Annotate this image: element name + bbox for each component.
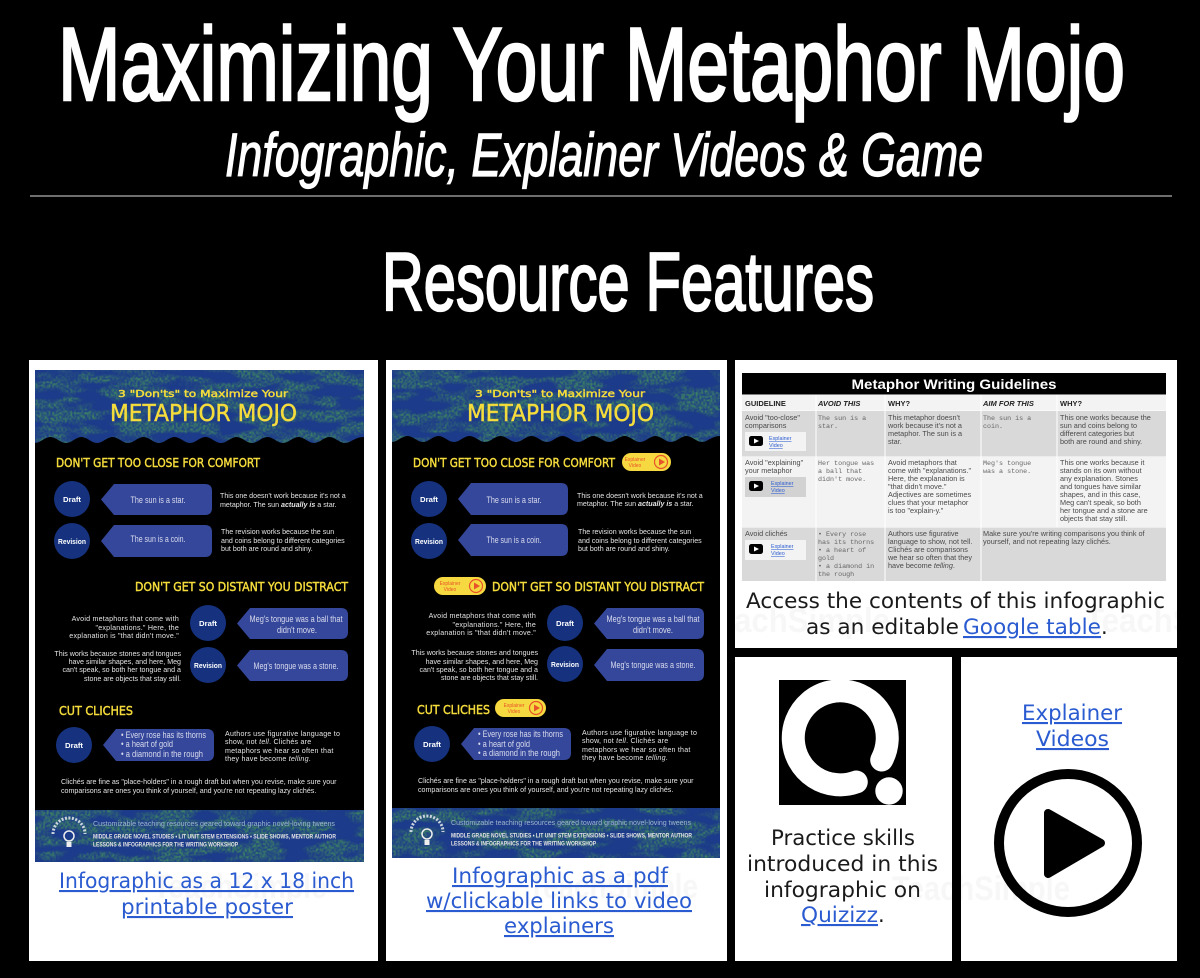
guidelines table: her tongue and a stone are xyxy=(1060,506,1148,515)
panel: printable poster xyxy=(29,360,378,961)
poster thumbnail with video buttons: Meg's tongue was a ball that xyxy=(606,614,700,624)
guidelines table: both are round and shiny. xyxy=(1060,437,1142,446)
caption: Access the contents of this infographic xyxy=(746,589,1165,613)
poster thumbnail: explanation is "that didn't move." xyxy=(69,632,179,640)
poster thumbnail with video buttons: • Every rose has its thorns xyxy=(478,729,563,739)
link text xyxy=(426,864,692,938)
caption: Google table xyxy=(963,615,1101,639)
caption xyxy=(746,589,1165,639)
caption: Practice skills xyxy=(771,826,915,850)
poster thumbnail: METAPHOR MOJO xyxy=(110,401,297,427)
poster thumbnail: The sun is a coin. xyxy=(130,534,186,544)
poster thumbnail: 3 "Don'ts" to Maximize Your xyxy=(118,389,289,400)
link text: explainers xyxy=(504,914,614,938)
link text: w/clickable links to video xyxy=(426,889,692,913)
caption: introduced in this xyxy=(747,852,938,876)
guidelines table: Make sure you're writing comparisons you think of xyxy=(983,529,1146,538)
guidelines table: shapes, and in this case, xyxy=(1060,490,1140,499)
guidelines table: "that didn't move." xyxy=(888,482,947,491)
poster thumbnail: MIDDLE GRADE NOVEL STUDIES • LIT UNIT STEM EXTENSIONS • SLIDE SHOWS, MENTOR AUTHOR xyxy=(93,834,337,840)
guidelines table: GUIDELINE xyxy=(745,399,786,408)
poster thumbnail with video buttons: explanation is "that didn't move." xyxy=(426,629,536,637)
caption: . xyxy=(878,903,885,927)
poster thumbnail with video buttons: The sun is a coin. xyxy=(486,535,542,545)
poster thumbnail: DON'T GET TOO CLOSE FOR COMFORT xyxy=(56,456,261,470)
guidelines table: • Every rose xyxy=(818,531,866,539)
panel: explainer videos xyxy=(961,657,1177,961)
poster thumbnail with video buttons: Draft xyxy=(423,740,442,749)
poster thumbnail: didn't move. xyxy=(277,625,317,635)
guidelines table: Clichés are comparisons xyxy=(888,545,968,554)
icon: quizizz logo xyxy=(779,680,906,805)
guidelines table: was a stone. xyxy=(983,468,1031,476)
caption: . xyxy=(1101,615,1108,639)
guidelines table: WHY? xyxy=(1060,399,1082,408)
poster thumbnail: • a heart of gold xyxy=(121,739,173,749)
poster thumbnail: comparisons are ones you think of yourself, and you're not repeating lazy clichés. xyxy=(61,787,316,795)
poster thumbnail: Clichés are fine as "place-holders" in a rough draft but when you revise, make sure your xyxy=(61,778,337,786)
poster thumbnail: stone are objects that stay still. xyxy=(84,675,181,683)
poster thumbnail with video buttons: but both are round and shiny. xyxy=(578,545,670,553)
guidelines table: your metaphor xyxy=(745,466,793,475)
guidelines table: stands on its own without xyxy=(1060,466,1142,475)
link text: Videos xyxy=(1036,727,1109,751)
poster thumbnail: • a diamond in the rough xyxy=(121,749,203,759)
guidelines table: metaphor. The sun is a xyxy=(888,429,963,438)
guidelines table: The sun is a xyxy=(818,415,866,423)
poster thumbnail with video buttons: Video xyxy=(508,709,521,715)
guidelines table: This metaphor doesn't xyxy=(888,413,960,422)
guidelines table: Avoid "explaining" xyxy=(745,458,804,467)
poster thumbnail with video buttons: This one doesn't work because it's not a xyxy=(577,492,703,500)
guidelines table: AIM FOR THIS xyxy=(982,399,1034,408)
poster thumbnail with video buttons: metaphor. The sun actually is a star. xyxy=(577,500,694,508)
poster thumbnail with video buttons: Customizable teaching resources geared toward graphic novel-loving tweens xyxy=(451,818,691,827)
poster thumbnail: CUT CLICHES xyxy=(59,704,133,718)
poster thumbnail with video buttons: show, not tell. Clichés are xyxy=(582,737,668,745)
guidelines table: Avoid clichés xyxy=(745,529,788,538)
poster thumbnail: have similar shapes, and here, Meg xyxy=(69,658,181,666)
guidelines table: Explainer xyxy=(771,544,794,550)
poster thumbnail with video buttons: • a diamond in the rough xyxy=(478,748,560,758)
guidelines table: Explainer xyxy=(771,481,794,487)
poster thumbnail with video buttons: Authors use figurative language to xyxy=(582,729,697,737)
section heading: Resource Features xyxy=(382,235,874,328)
guidelines table: Video xyxy=(769,443,783,449)
guidelines table: yourself, and not repeating lazy clichés. xyxy=(983,537,1111,546)
panel: explainer videos: TeachSimple xyxy=(892,870,1070,908)
guidelines table: Her tongue was xyxy=(818,460,874,468)
poster thumbnail with video buttons: Explainer xyxy=(504,703,525,709)
guidelines table: Meg can't speak, so both xyxy=(1060,498,1141,507)
link text xyxy=(1022,701,1122,751)
guidelines table: we hear so often that they xyxy=(887,553,972,562)
guidelines table: any explanation. Stones xyxy=(1060,474,1138,483)
guidelines table: Metaphor Writing Guidelines xyxy=(852,377,1056,392)
poster thumbnail with video buttons: didn't move. xyxy=(633,625,673,635)
guidelines table: language to show, not tell. xyxy=(888,537,972,546)
guidelines table: comparisons xyxy=(745,421,787,430)
poster thumbnail: metaphor. The sun actually is a star. xyxy=(220,501,337,509)
poster thumbnail with video buttons: they have become telling. xyxy=(582,754,668,762)
poster thumbnail with video buttons: • a heart of gold xyxy=(478,739,530,749)
poster thumbnail: Meg's tongue was a stone. xyxy=(254,661,338,671)
guidelines table: work because it's not a xyxy=(887,421,963,430)
poster thumbnail: Customizable teaching resources geared toward graphic novel-loving tweens xyxy=(93,819,335,828)
poster thumbnail with video buttons: Explainer xyxy=(440,581,461,587)
poster thumbnail xyxy=(35,370,364,862)
poster thumbnail with video buttons: "explanations." Here, the xyxy=(452,621,536,629)
poster thumbnail: LESSONS & INFOGRAPHICS FOR THE WRITING WORKSHOP xyxy=(93,842,238,848)
poster thumbnail with video buttons: Meg's tongue was a stone. xyxy=(610,660,696,670)
poster thumbnail with video buttons: Clichés are fine as "place-holders" in a rough draft but when you revise, make sure your xyxy=(418,777,694,785)
guidelines table: The sun is a xyxy=(983,415,1031,423)
panel: quizizz: TeachSimple xyxy=(892,870,1070,908)
guidelines table: come with "explanations." xyxy=(888,466,971,475)
poster thumbnail: • Every rose has its thorns xyxy=(121,730,206,740)
poster thumbnail with video buttons: MIDDLE GRADE NOVEL STUDIES • LIT UNIT STEM EXTENSIONS • SLIDE SHOWS, MENTOR AUTHOR xyxy=(451,834,693,840)
poster thumbnail with video buttons: DON'T GET TOO CLOSE FOR COMFORT xyxy=(413,456,616,470)
poster thumbnail with video buttons: The sun is a star. xyxy=(486,495,542,505)
poster thumbnail with video buttons: CUT CLICHES xyxy=(417,703,490,717)
poster thumbnail: Meg's tongue was a ball that xyxy=(250,614,343,624)
caption: Quizizz xyxy=(801,903,878,927)
guidelines table: a ball that xyxy=(818,468,862,476)
link text: Infographic as a pdf xyxy=(452,864,669,888)
guidelines table: Here, the explanation is xyxy=(888,474,965,483)
icon: play button xyxy=(999,774,1137,912)
panel: google table xyxy=(735,360,1177,648)
guidelines table: This one works because it xyxy=(1060,458,1144,467)
guidelines table: gold xyxy=(818,555,834,563)
guidelines table: Avoid "too-close" xyxy=(745,413,800,422)
poster thumbnail: The sun is a star. xyxy=(130,495,186,505)
poster thumbnail: DON'T GET SO DISTANT YOU DISTRACT xyxy=(135,580,349,594)
link text: Infographic as a 12 x 18 inch xyxy=(59,869,354,893)
poster thumbnail with video buttons: can't speak, so both her tongue and a xyxy=(420,666,538,674)
poster thumbnail with video buttons: Draft xyxy=(556,619,575,628)
poster thumbnail with video buttons: The revision works because the sun xyxy=(578,528,691,536)
poster thumbnail with video buttons: 3 "Don'ts" to Maximize Your xyxy=(475,389,646,400)
guidelines table: • a diamond in xyxy=(818,563,874,571)
guidelines table: Video xyxy=(771,488,785,494)
guidelines table: star. xyxy=(888,437,902,446)
guidelines table: star. xyxy=(818,423,838,431)
poster thumbnail: The revision works because the sun xyxy=(221,528,334,536)
poster thumbnail with video buttons: LESSONS & INFOGRAPHICS FOR THE WRITING WORKSHOP xyxy=(451,842,596,848)
guidelines table: • a heart of xyxy=(818,547,866,555)
poster thumbnail: Revision xyxy=(194,661,222,670)
guidelines table: objects that stay still. xyxy=(1060,514,1127,523)
poster thumbnail with video buttons: Avoid metaphors that come with xyxy=(429,612,536,620)
link text: Explainer xyxy=(1022,701,1122,725)
poster thumbnail with video buttons: Explainer xyxy=(625,457,646,463)
guidelines table: has its thorns xyxy=(818,539,874,547)
poster thumbnail with video buttons: Revision xyxy=(415,537,443,546)
panel: pdf poster: TeachSimple xyxy=(528,868,698,906)
poster thumbnail: Avoid metaphors that come with xyxy=(72,615,179,623)
guidelines table: WHY? xyxy=(888,399,910,408)
poster thumbnail: but both are round and shiny. xyxy=(221,545,313,553)
poster thumbnail: Authors use figurative language to xyxy=(225,730,340,738)
poster thumbnail with video buttons: metaphors we hear so often that xyxy=(582,746,691,754)
caption: infographic on xyxy=(764,878,921,902)
poster thumbnail: they have become telling. xyxy=(225,755,311,763)
poster thumbnail: metaphors we hear so often that xyxy=(225,747,334,755)
poster thumbnail with video buttons: This works because stones and tongues xyxy=(411,649,538,657)
poster thumbnail: can't speak, so both her tongue and a xyxy=(62,666,181,674)
guidelines table: and tongues have similar xyxy=(1060,482,1142,491)
poster thumbnail: This one doesn't work because it's not a xyxy=(220,492,346,500)
poster thumbnail with video buttons: have similar shapes, and here, Meg xyxy=(426,658,538,666)
panel: printable poster: TeachSimple xyxy=(153,868,327,906)
poster thumbnail with video buttons: comparisons are ones you think of yourself, and you're not repeating lazy clichés. xyxy=(418,786,673,794)
poster thumbnail: Revision xyxy=(58,537,86,546)
guidelines table: sun and coins belong to xyxy=(1060,421,1137,430)
link text xyxy=(59,869,354,919)
guidelines table: Adjectives are sometimes xyxy=(888,490,971,499)
guidelines table: Meg's tongue xyxy=(983,460,1031,468)
poster thumbnail with video buttons: Video xyxy=(444,587,457,593)
guidelines table: Video xyxy=(771,551,785,557)
poster thumbnail with video buttons xyxy=(392,370,720,858)
poster thumbnail with video buttons: and coins belong to different categories xyxy=(578,537,702,545)
guidelines table: didn't move. xyxy=(818,476,866,484)
panel: pdf poster xyxy=(386,360,727,961)
poster thumbnail with video buttons: Revision xyxy=(551,660,579,669)
poster thumbnail: Draft xyxy=(63,495,82,504)
guidelines table: different categories but xyxy=(1060,429,1134,438)
guidelines table: This one works because the xyxy=(1060,413,1151,422)
poster thumbnail with video buttons: METAPHOR MOJO xyxy=(467,401,654,427)
poster thumbnail: This works because stones and tongues xyxy=(54,650,181,658)
poster thumbnail with video buttons: stone are objects that stay still. xyxy=(441,674,538,682)
poster thumbnail with video buttons: Video xyxy=(629,463,642,469)
guidelines table: have become telling. xyxy=(888,561,955,570)
panel: google table: TeachSimple xyxy=(700,602,890,640)
caption: as an editable xyxy=(806,615,959,639)
guidelines table xyxy=(742,373,1166,581)
guidelines table: is too "explain-y." xyxy=(888,506,944,515)
link text: printable poster xyxy=(121,895,293,919)
poster thumbnail: "explanations." Here, the xyxy=(96,624,179,632)
panel: quizizz xyxy=(735,657,952,961)
guidelines table: clues that your metaphor xyxy=(888,498,969,507)
poster thumbnail: show, not tell. Clichés are xyxy=(225,738,311,746)
poster thumbnail with video buttons: DON'T GET SO DISTANT YOU DISTRACT xyxy=(492,580,705,594)
guidelines table: Avoid metaphors that xyxy=(888,458,957,467)
guidelines table: Explainer xyxy=(769,436,792,442)
poster thumbnail: and coins belong to different categories xyxy=(221,537,345,545)
poster thumbnail: Draft xyxy=(199,619,218,628)
poster thumbnail: Draft xyxy=(65,741,84,750)
caption xyxy=(747,826,938,927)
guidelines table: Authors use figurative xyxy=(888,529,959,538)
poster thumbnail with video buttons: Draft xyxy=(420,495,439,504)
guidelines table: coin. xyxy=(983,423,1003,431)
guidelines table: AVOID THIS xyxy=(817,399,860,408)
guidelines table: the rough xyxy=(818,571,854,579)
